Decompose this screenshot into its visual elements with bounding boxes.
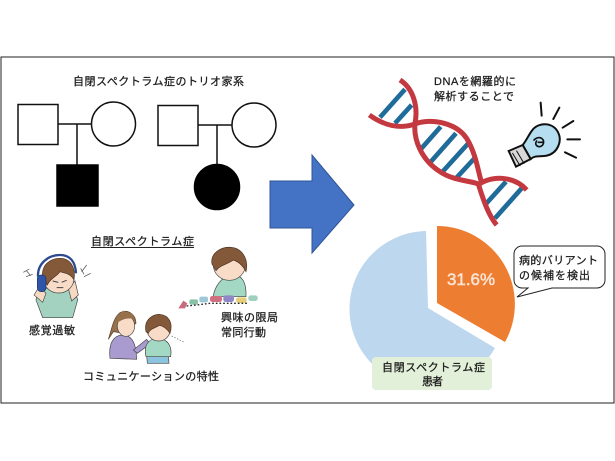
- illustration: child with headphones: [23, 255, 91, 318]
- pie chart: patients with candidate variants: [349, 226, 515, 387]
- callout: pathogenic variant candidates detected: 病的バリアント: [519, 253, 598, 267]
- pedigree: trio with affected daughter: [158, 103, 276, 210]
- icon: light bulb: [509, 103, 580, 167]
- illustration: parent and child communicating: [108, 311, 185, 363]
- label: communication characteristics: コミュニケーションの特性: [83, 369, 219, 383]
- pie slice: other patients: [349, 231, 495, 387]
- label: sensory hypersensitivity: 感覚過敏: [29, 323, 75, 337]
- arrow: [270, 155, 354, 253]
- text: comprehensive DNA analysis: 解析することで: [434, 89, 514, 103]
- illustration: child lining up toy cars: [178, 247, 258, 308]
- title: trio family: 自閉スペクトラム症のトリオ家系: [73, 74, 244, 88]
- pie value: 31.6%: [447, 270, 495, 289]
- pie slice: 31.6 percent: [437, 226, 515, 342]
- label: restricted interests and repetitive behaviors: 興味の限局: [221, 310, 278, 324]
- text: comprehensive DNA analysis: DNAを網羅的に: [434, 74, 516, 88]
- label: ASD patients: [372, 357, 492, 390]
- text: comprehensive DNA analysis: [434, 74, 516, 103]
- callout: pathogenic variant candidates detected: の候補を検出: [519, 268, 590, 282]
- label: ASD patients: 患者: [422, 375, 443, 388]
- label: restricted interests and repetitive behaviors: 常同行動: [221, 325, 266, 339]
- DNA double helix: [369, 80, 527, 225]
- label: ASD patients: 自閉スペクトラム症: [382, 361, 485, 374]
- heading: autism spectrum disorder: 自閉スペクトラム症: [91, 235, 194, 248]
- callout: pathogenic variant candidates detected: [514, 246, 605, 297]
- pedigree: trio with affected son: [18, 102, 136, 206]
- label: restricted interests and repetitive behaviors: [221, 310, 278, 339]
